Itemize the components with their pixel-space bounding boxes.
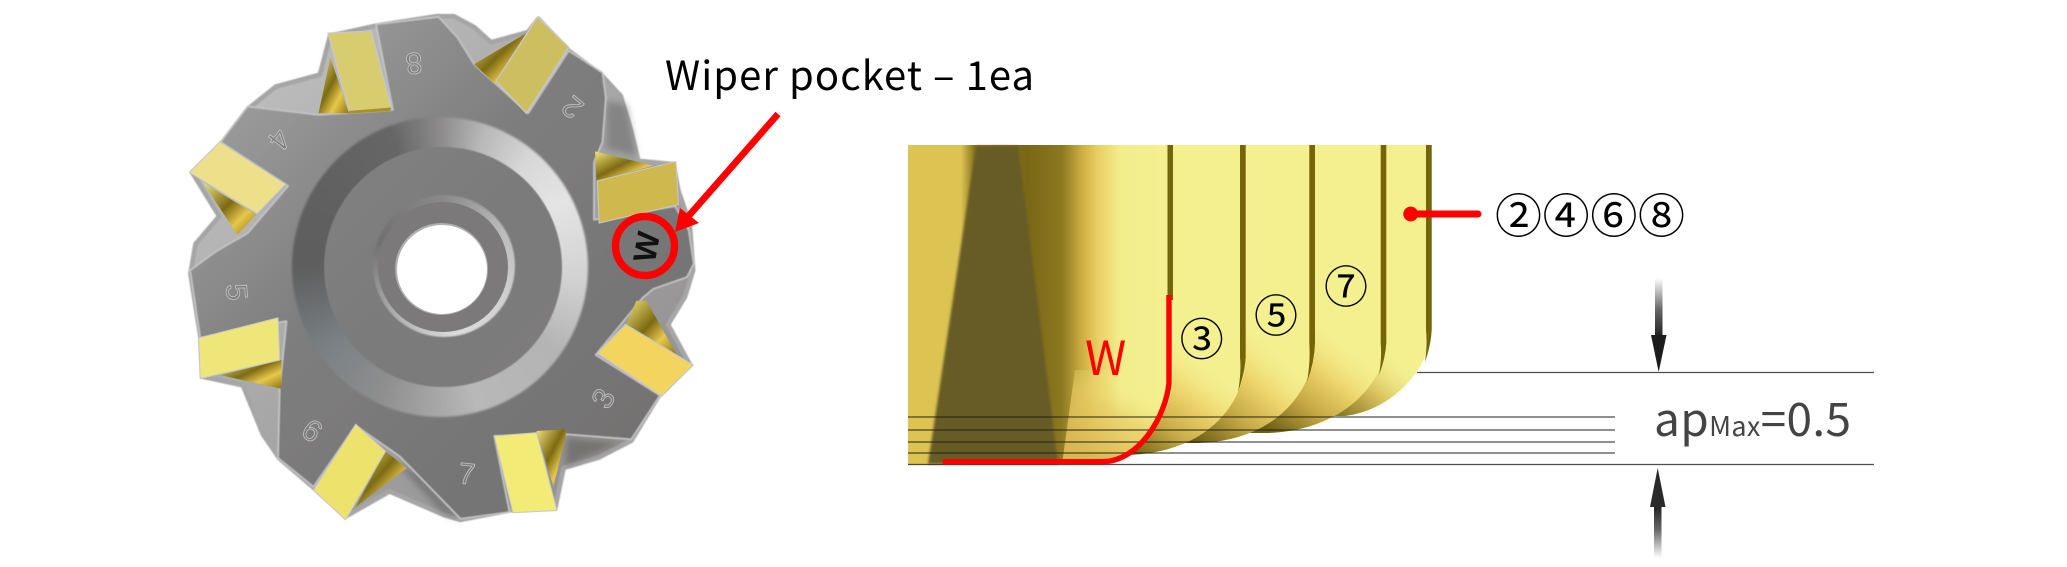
label: 7: ⑦	[1324, 252, 1368, 316]
label: apMax=0.5: apMax=0.5	[1654, 384, 1851, 450]
red circle around W pocket	[616, 216, 674, 276]
engraved insert numbers: 5	[219, 282, 253, 302]
insert 6 bottom left	[314, 424, 406, 520]
tooth 5 profile	[1140, 145, 1315, 443]
engraved insert numbers: 2	[556, 89, 590, 125]
label: 5: ⑤	[1254, 281, 1298, 345]
insert 2 upper right	[474, 17, 569, 113]
engraved insert numbers: 4	[261, 122, 297, 156]
arrow: bottom depth	[1650, 468, 1666, 558]
engraved insert numbers: 6	[295, 413, 328, 450]
label: 3: ③	[1180, 304, 1224, 368]
cutter inserts	[189, 17, 693, 520]
engraved insert numbers: 8	[404, 45, 424, 80]
flank shading	[396, 101, 636, 519]
engraved insert numbers	[219, 45, 622, 492]
label: W: W	[1085, 320, 1126, 389]
engraved insert numbers: 7	[457, 457, 477, 492]
insert 1 upper left	[189, 142, 285, 235]
tooth 3 profile	[1050, 145, 1246, 455]
insert 3 right	[595, 151, 679, 223]
insert 7 left	[199, 318, 281, 389]
depth lines	[908, 372, 1874, 464]
tooth 8 profile	[1300, 145, 1432, 416]
engraved insert numbers: 3	[585, 383, 622, 414]
insert 4 lower right	[597, 301, 693, 396]
heading: Wiper pocket - 1ea: Wiper pocket – 1ea	[665, 44, 1034, 102]
icon: W mark on wiper pocket: W	[626, 228, 667, 265]
label: 2 4 6 8: ②④⑥⑧	[1495, 178, 1685, 247]
insert 8 top	[319, 31, 391, 114]
callout: red leader with dot	[1403, 207, 1478, 221]
cutter body	[190, 16, 694, 520]
tooth 7 profile	[1200, 145, 1386, 433]
red wiper edge line	[943, 295, 1169, 462]
wiper tooth profile	[908, 145, 1173, 464]
insert 5 bottom right	[494, 429, 567, 513]
arrow: top depth	[1651, 278, 1666, 372]
arrow: wiper pocket callout	[675, 114, 778, 232]
insert profile diagram	[908, 145, 1432, 464]
